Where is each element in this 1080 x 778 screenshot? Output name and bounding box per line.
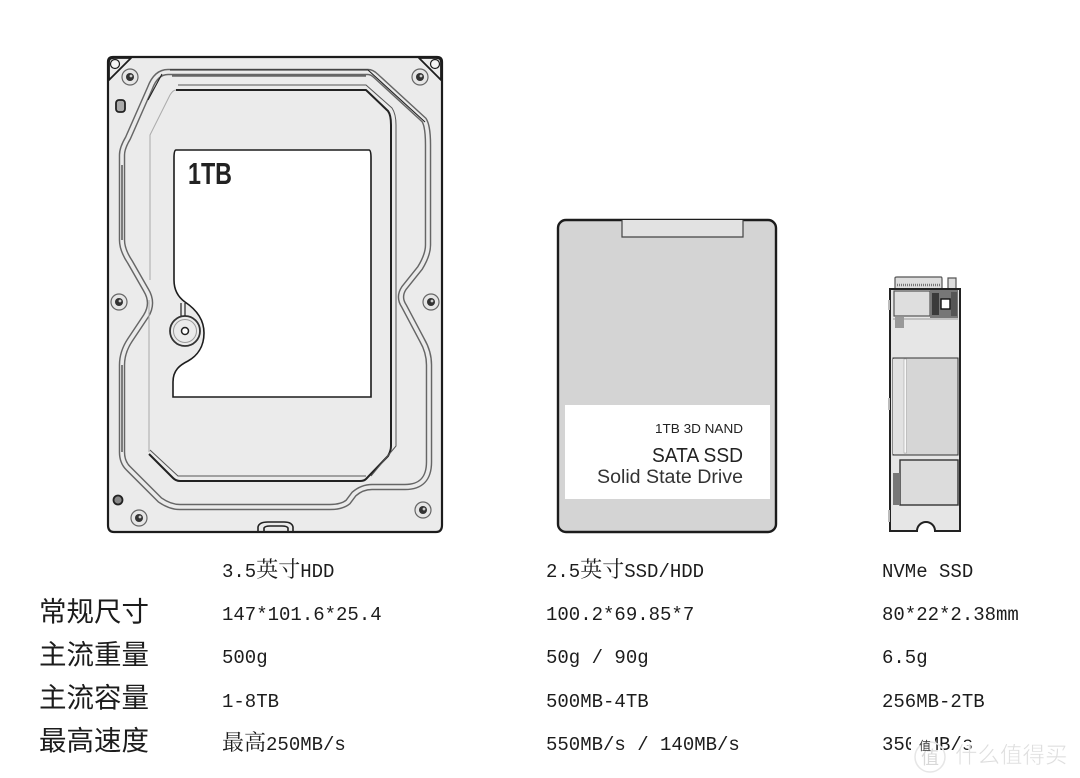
column: 2.5 inch SSD/HDD specs: 550MB/s / 140MB/s	[546, 734, 740, 756]
HDD mounting screws	[111, 69, 439, 526]
illustration: NVMe SSD	[888, 277, 960, 531]
column: 3.5 inch HDD specs: 147*101.6*25.4	[222, 604, 382, 626]
HDD white label with 1TB	[173, 150, 371, 397]
column: 3.5 inch HDD specs: 500g	[222, 647, 268, 669]
NVMe controller chip area	[893, 290, 958, 328]
column: NVMe SSD specs: 3500MB/s	[882, 734, 973, 756]
SSD white label: 1TB 3D NAND	[655, 421, 743, 436]
illustration: 3.5-inch HDD	[108, 57, 442, 532]
NVMe board	[890, 289, 960, 531]
HDD body plate	[108, 57, 442, 532]
column: NVMe SSD specs	[882, 561, 1019, 756]
column: NVMe SSD specs: 6.5g	[882, 647, 928, 669]
SSD top tab	[622, 220, 743, 237]
column: 3.5 inch HDD specs: 1-8TB	[222, 691, 279, 713]
NVMe heat spreader panel	[893, 358, 958, 455]
column: 3.5 inch HDD specs	[222, 553, 382, 757]
column: 2.5 inch SSD/HDD specs: 500MB-4TB	[546, 691, 649, 713]
HDD corner brackets	[109, 58, 441, 80]
column: 2.5 inch SSD/HDD specs: 2.5英寸SSD/HDD	[546, 553, 704, 584]
NVMe lower memory chip	[893, 460, 958, 505]
column: 2.5 inch SSD/HDD specs: 50g / 90g	[546, 647, 649, 669]
row labels: 主流重量	[39, 632, 149, 672]
NVMe connector	[895, 277, 956, 289]
NVMe side notches	[888, 300, 890, 522]
column: NVMe SSD specs: 256MB-2TB	[882, 691, 985, 713]
HDD spindle circle	[170, 303, 200, 346]
column: 3.5 inch HDD specs: 3.5英寸HDD	[222, 553, 334, 584]
watermark	[911, 735, 1068, 772]
row labels: 常规尺寸	[39, 589, 149, 629]
column: NVMe SSD specs: NVMe SSD	[882, 561, 973, 583]
column: NVMe SSD specs: 80*22*2.38mm	[882, 604, 1019, 626]
row labels: 主流容量	[39, 675, 149, 715]
column: 2.5 inch SSD/HDD specs	[546, 553, 740, 756]
column: 2.5 inch SSD/HDD specs: 100.2*69.85*7	[546, 604, 694, 626]
watermark: 值	[919, 737, 931, 754]
SSD white label	[565, 405, 770, 499]
HDD outer channel	[122, 70, 429, 507]
row labels: 最高速度	[39, 718, 149, 758]
column: 3.5 inch HDD specs: 最高250MB/s	[222, 726, 346, 757]
HDD white label with 1TB: 1TB	[188, 156, 232, 191]
illustration: 2.5-inch SSD	[558, 220, 776, 532]
HDD bottom tab	[258, 522, 293, 532]
HDD inner channel	[149, 85, 396, 481]
watermark: 什么值得买	[955, 738, 1068, 770]
SSD white label: SATA SSD	[652, 445, 743, 467]
watermark: 值	[921, 744, 939, 770]
SSD white label: Solid State Drive	[597, 467, 743, 488]
SSD body	[558, 220, 776, 532]
row labels	[39, 589, 149, 758]
